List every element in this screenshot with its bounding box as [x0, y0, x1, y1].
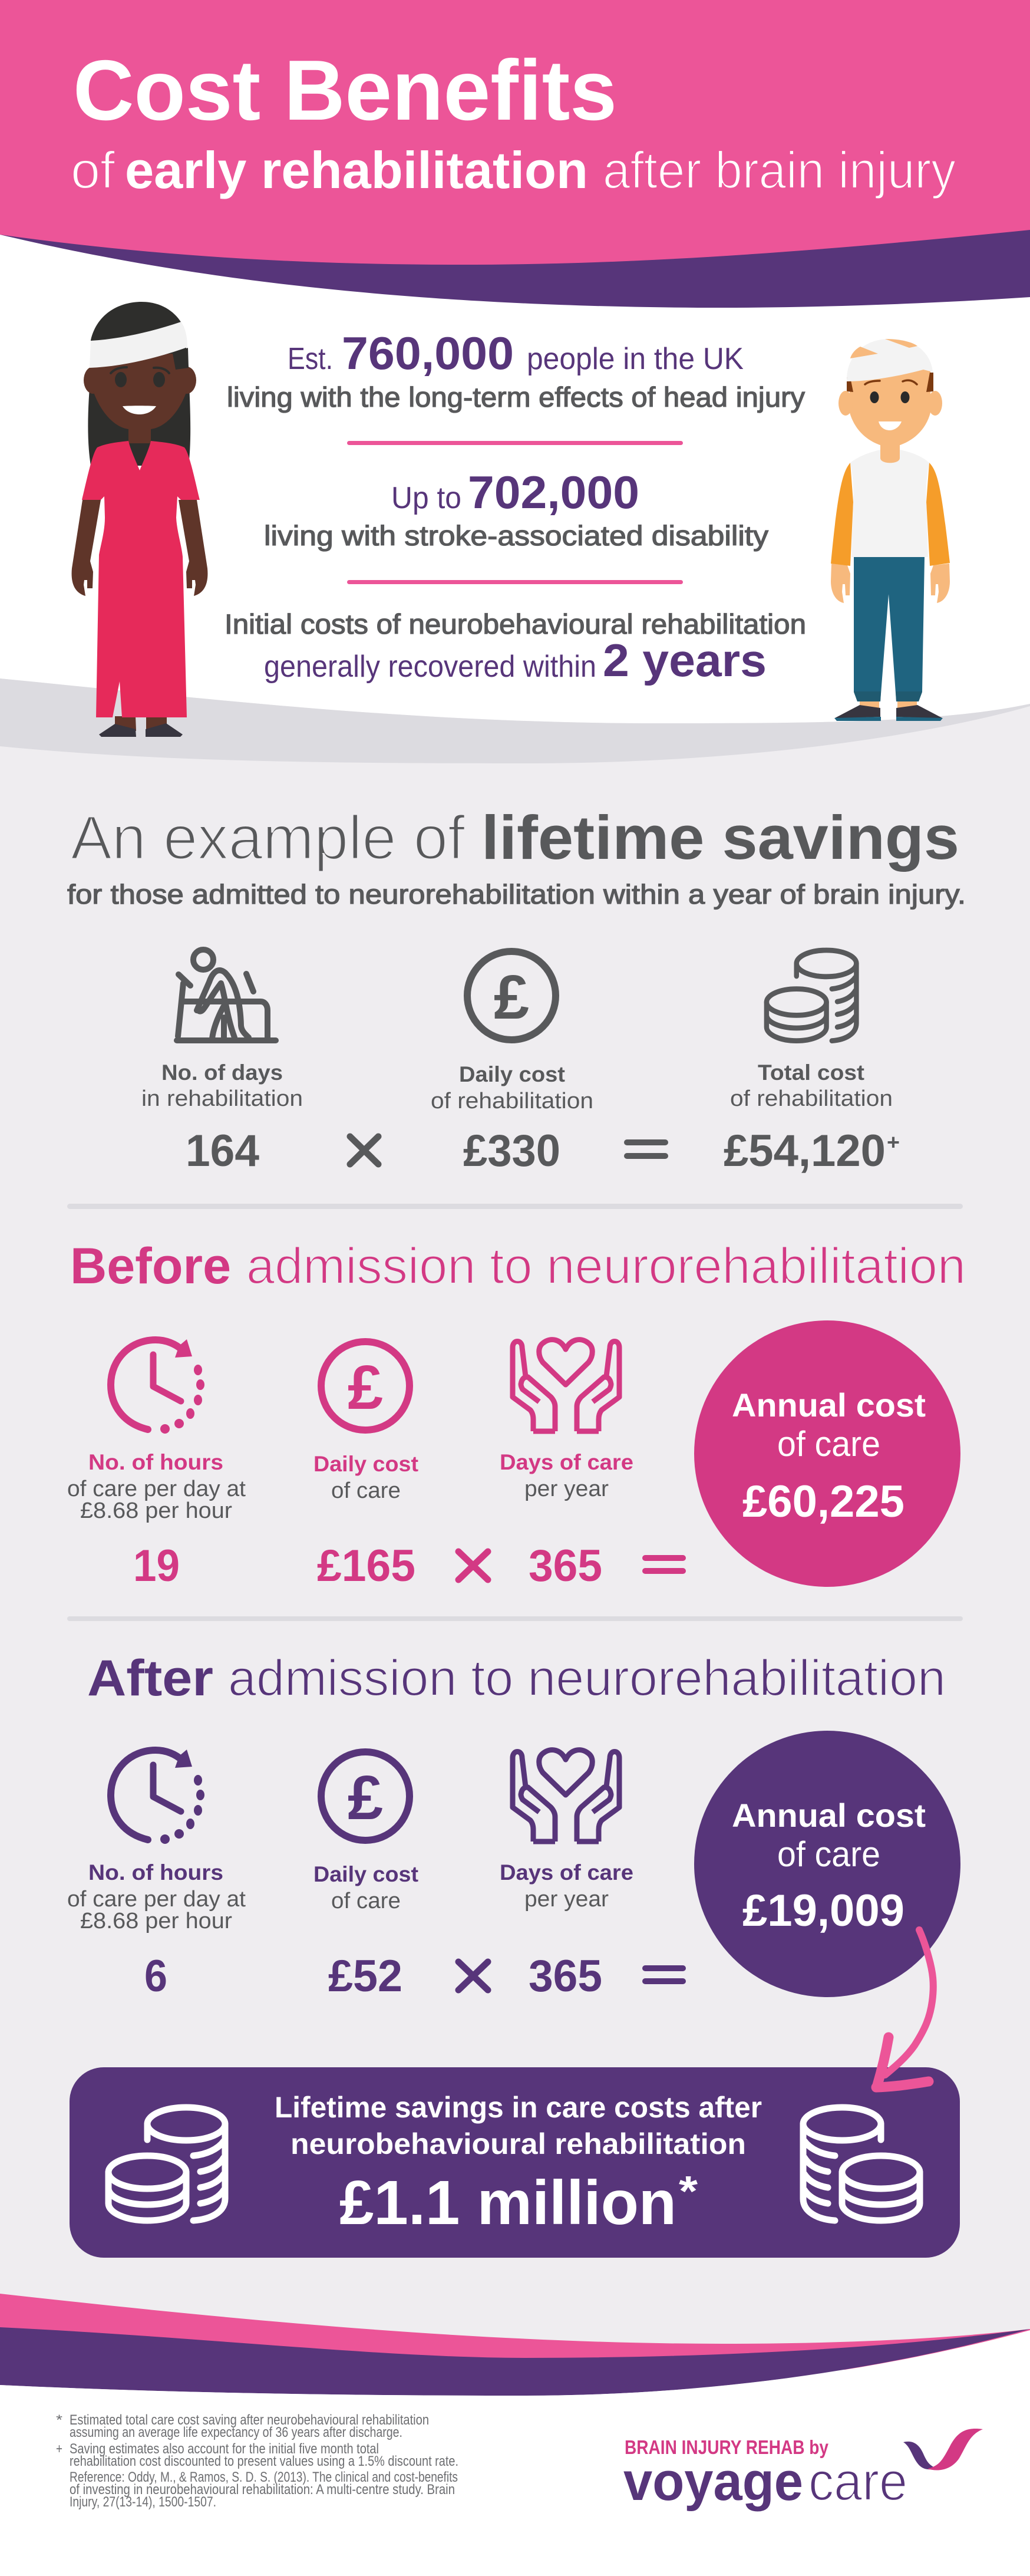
footnotes: assuming an average life expectancy of 36 years after discharge. — [70, 2425, 402, 2440]
stat: 760,000 people: Est. — [288, 342, 333, 376]
icon: clock — [111, 1339, 204, 1434]
equation: annual care cost: 365 — [529, 1951, 602, 2001]
label: total cost of rehabilitation: of rehabilitation — [730, 1086, 893, 1111]
panel: before admission — [67, 1238, 966, 1591]
footnotes: rehabilitation cost discounted to present values using a 1.5% discount rate. — [70, 2453, 458, 2469]
label: daily cost of rehabilitation — [431, 1062, 593, 1114]
heading: lifetime savings — [481, 803, 959, 872]
panel: lifetime savings total — [70, 2067, 960, 2258]
label: daily cost of care: of care — [331, 1889, 401, 1913]
stat: 760,000 people: living with the long-term effects of head injury — [227, 381, 805, 413]
equation: rehabilitation cost — [186, 1126, 900, 1176]
label: hours of care: No. of hours — [88, 1450, 223, 1474]
label: hours of care: of care per day at — [67, 1477, 246, 1501]
equation: annual care cost: 365 — [529, 1541, 602, 1591]
label: daily cost of rehabilitation: Daily cost — [459, 1062, 565, 1086]
label: days in rehabilitation: in rehabilitation — [141, 1086, 303, 1111]
icon: pound coin — [467, 951, 556, 1040]
icon: pound coin: £ — [348, 1763, 383, 1833]
header pink background — [0, 0, 1030, 265]
logo: Voyage Care: BRAIN INJURY REHAB by — [625, 2436, 829, 2458]
logo: Voyage Care: voyage — [623, 2452, 803, 2512]
equation: rehabilitation cost: £330 — [463, 1126, 560, 1176]
label: daily cost of care: Daily cost — [313, 1452, 418, 1476]
page background — [0, 678, 1030, 2417]
footnotes: of investing in neurobehavioural rehabilitation: A multi-centre study. Brain — [70, 2482, 455, 2498]
label: days of care: per year — [524, 1477, 609, 1501]
subheading: for those admitted to neurorehabilitation within a year of brain injury. — [67, 879, 966, 910]
label: days of care: Days of care — [500, 1450, 633, 1474]
icon: coins right — [803, 2107, 920, 2221]
icon: pound coin: £ — [348, 1353, 383, 1422]
illustration: woman with head bandage — [72, 302, 207, 737]
label: hours of care: £8.68 per hour — [80, 1909, 232, 1933]
callout: annual cost 60,225 — [694, 1320, 960, 1587]
stat: costs recovered in 2 years: 2 years — [603, 634, 767, 686]
panel: key statistics — [225, 327, 806, 686]
subtitle: of — [71, 141, 115, 199]
icon: coins left — [108, 2107, 225, 2221]
stat: 702,000 stroke: Up to — [391, 481, 461, 515]
footnotes: Reference: Oddy, M., & Ramos, S. D. S. (2013). The clinical and cost-benefits — [70, 2469, 458, 2485]
equation: annual care cost: 6 — [144, 1951, 167, 2001]
stat: 702,000 stroke: living with stroke-associated disability — [264, 520, 769, 551]
icon: stack of coins — [767, 950, 856, 1041]
label: days of care: per year — [524, 1887, 609, 1912]
equation: rehabilitation cost: 164 — [186, 1126, 259, 1176]
logo: Voyage Care — [623, 2429, 983, 2512]
savings text — [275, 2091, 762, 2238]
equation: annual care cost — [133, 1541, 683, 1591]
label: days in rehabilitation — [141, 1060, 303, 1111]
label: total cost of rehabilitation — [730, 1060, 893, 1111]
equation: annual care cost: £165 — [317, 1541, 415, 1591]
stat: 702,000 stroke — [264, 466, 769, 551]
icon: person with walking frame — [177, 950, 276, 1040]
label: daily cost of rehabilitation: of rehabilitation — [431, 1089, 593, 1114]
footnotes: * — [56, 2412, 62, 2428]
stat: 760,000 people: people in the UK — [527, 342, 744, 376]
logo swoosh — [903, 2429, 983, 2470]
label: hours of care: £8.68 per hour — [80, 1498, 232, 1523]
panel: after admission — [67, 1650, 960, 2001]
savings text: neurobehavioural rehabilitation — [290, 2127, 746, 2160]
subtitle — [71, 141, 956, 199]
illustration: man with head bandage — [831, 339, 950, 721]
footnotes: Injury, 27(13-14), 1500-1507. — [70, 2494, 216, 2510]
label: daily cost of care: Daily cost — [313, 1862, 418, 1886]
label: daily cost of care — [313, 1452, 418, 1503]
footnotes: + — [56, 2441, 62, 2457]
label: daily cost of care — [313, 1862, 418, 1913]
icon: pound coin — [321, 1752, 410, 1840]
heading: Before — [70, 1238, 231, 1294]
callout: annual cost 60,225: Annual cost — [732, 1386, 926, 1424]
arrow: from annual cost to lifetime savings — [876, 1930, 933, 2087]
savings text: * — [679, 2168, 698, 2215]
equation: annual care cost: 19 — [133, 1541, 180, 1591]
savings text: Lifetime savings in care costs after — [275, 2091, 762, 2124]
page footer background — [0, 2330, 1030, 2576]
callout: annual cost 19,009 — [694, 1731, 960, 1997]
footnotes — [56, 2412, 458, 2510]
panel: lifetime savings example — [67, 803, 966, 1176]
footnotes: Saving estimates also account for the initial five month total — [70, 2441, 379, 2457]
label: days of care — [500, 1450, 633, 1501]
label: days in rehabilitation: No. of days — [161, 1060, 283, 1085]
callout: annual cost 19,009: of care — [777, 1834, 880, 1874]
title: Cost Benefits — [73, 42, 617, 138]
icon: hands holding heart — [513, 1340, 619, 1431]
label: hours of care: of care per day at — [67, 1887, 246, 1912]
stat: costs recovered in 2 years: Initial costs of neurobehavioural rehabilitation — [225, 608, 806, 640]
heading: admission to neurorehabilitation — [246, 1238, 966, 1294]
callout: annual cost 60,225: £60,225 — [742, 1477, 904, 1527]
label: days of care: Days of care — [500, 1860, 633, 1885]
heading — [71, 803, 959, 872]
callout: annual cost 19,009: £19,009 — [742, 1886, 904, 1936]
header purple swoosh — [0, 224, 1030, 308]
icon: clock — [111, 1750, 204, 1844]
icon: pound coin: £ — [494, 963, 529, 1032]
icon: pound coin — [321, 1342, 410, 1430]
callout: annual cost 19,009: Annual cost — [732, 1797, 926, 1834]
subtitle: after brain injury — [603, 141, 956, 199]
icon: hands holding heart — [513, 1750, 619, 1842]
bottom wave — [0, 2294, 1030, 2396]
label: total cost of rehabilitation: Total cost — [758, 1060, 864, 1085]
ground shadow — [0, 678, 1030, 763]
subtitle: early rehabilitation — [125, 141, 588, 199]
label: hours of care: No. of hours — [88, 1860, 223, 1885]
label: hours of care — [67, 1450, 246, 1523]
label: days of care — [500, 1860, 633, 1912]
heading: After — [87, 1650, 213, 1707]
stat: 760,000 people: 760,000 — [342, 327, 514, 379]
savings text: £1.1 million — [339, 2168, 676, 2238]
equation: rehabilitation cost: + — [887, 1130, 900, 1154]
heading: admission to neurorehabilitation — [228, 1650, 946, 1707]
heading: An example of — [71, 803, 466, 872]
stat: 702,000 stroke: 702,000 — [468, 466, 639, 518]
equation: rehabilitation cost: £54,120 — [724, 1126, 886, 1176]
equation: annual care cost: £52 — [328, 1951, 402, 2001]
stat: 760,000 people — [227, 327, 805, 413]
stat: costs recovered in 2 years: generally recovered within — [264, 650, 596, 684]
header banner — [0, 0, 1030, 308]
footnotes: Estimated total care cost saving after neurobehavioural rehabilitation — [70, 2412, 429, 2428]
label: hours of care — [67, 1860, 246, 1933]
equation: annual care cost — [144, 1951, 683, 2001]
stat: costs recovered in 2 years — [225, 608, 806, 686]
callout: annual cost 60,225: of care — [777, 1424, 880, 1464]
label: daily cost of care: of care — [331, 1478, 401, 1503]
logo: Voyage Care: care — [808, 2452, 907, 2512]
